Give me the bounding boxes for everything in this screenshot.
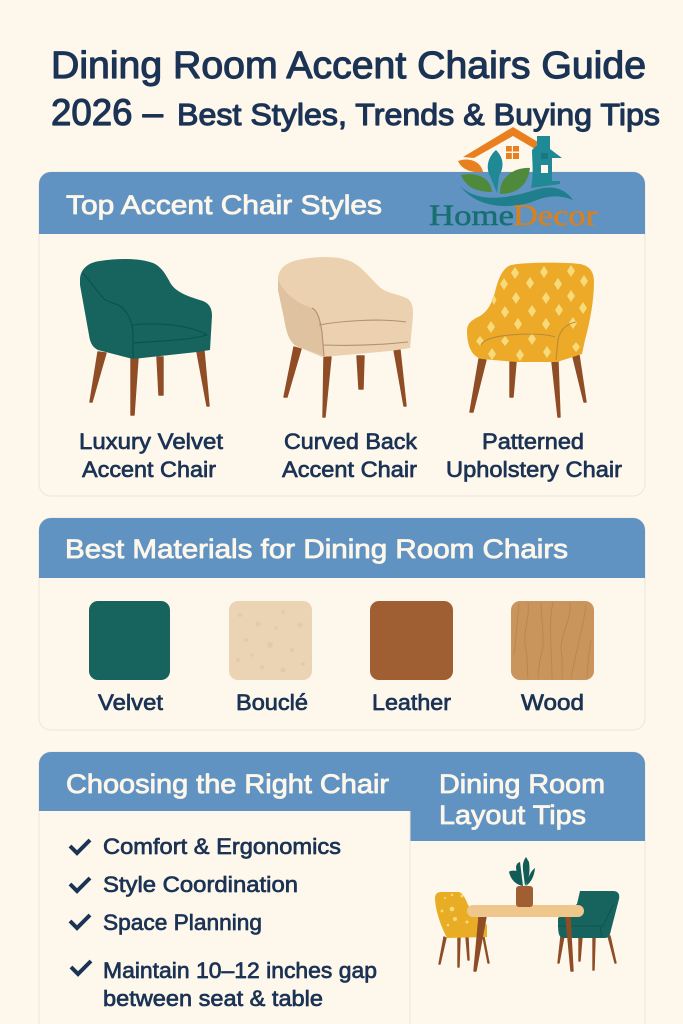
icon: patterned upholstery chair — [467, 263, 594, 417]
green chair — [558, 891, 619, 970]
label: luxury velvet accent chair: Luxury Velvet — [79, 429, 223, 454]
logo wordmark: Home — [429, 199, 514, 232]
logo house — [531, 136, 562, 188]
item: space: Space Planning — [103, 910, 262, 935]
panel header: best materials — [39, 518, 645, 578]
icon: check — [70, 878, 90, 891]
label: boucle: Bouclé — [236, 690, 308, 715]
potted plant — [509, 857, 535, 907]
item: maintain gap: between seat & table — [103, 986, 323, 1011]
icon: check — [70, 915, 90, 928]
swatch: velvet — [89, 601, 170, 680]
icon: curved back chair — [278, 257, 413, 417]
title: Dining Room Accent Chairs Guide — [51, 45, 646, 87]
label: luxury velvet accent chair — [79, 429, 223, 482]
title — [51, 45, 660, 133]
panel header: top accent chair styles — [39, 172, 645, 234]
icon: home decor logo: Decor — [513, 199, 597, 232]
icon: check — [71, 961, 91, 974]
yellow chair — [435, 892, 489, 967]
label: leather: Leather — [372, 690, 451, 715]
logo swoosh — [460, 186, 573, 206]
icon: check — [70, 840, 90, 853]
heading: best materials: Best Materials for Dining Room Chairs — [65, 534, 568, 564]
label: wood: Wood — [521, 690, 584, 715]
illustration: dining table with chairs — [435, 857, 619, 971]
table — [467, 905, 584, 971]
label: patterned upholstery chair — [446, 429, 622, 482]
item: maintain gap: Maintain 10–12 inches gap — [103, 958, 377, 983]
item: style: Style Coordination — [103, 872, 298, 897]
swatch: boucle — [229, 601, 312, 680]
panel: top accent chair styles — [39, 172, 645, 496]
title: 2026 – — [51, 92, 163, 133]
title: Best Styles, Trends & Buying Tips — [177, 97, 660, 132]
label: patterned upholstery chair: Upholstery Chair — [446, 457, 622, 482]
heading: dining room layout tips — [439, 769, 605, 830]
heading: choosing the right chair: Choosing the Right Chair — [66, 769, 389, 799]
label: curved back accent chair — [282, 429, 418, 482]
checklist — [70, 834, 377, 1011]
panel header: choosing and layout — [39, 752, 645, 841]
item: maintain gap — [103, 958, 377, 1011]
icon: home decor logo — [429, 127, 597, 232]
label: luxury velvet accent chair: Accent Chair — [82, 457, 216, 482]
logo window — [506, 146, 519, 159]
swatch: wood — [511, 601, 594, 680]
heading: top accent chair styles: Top Accent Chair Styles — [66, 190, 382, 220]
panel: best materials — [39, 518, 645, 730]
heading: dining room layout tips: Layout Tips — [439, 800, 586, 830]
label: curved back accent chair: Curved Back — [284, 429, 418, 454]
panel: choosing the right chair and layout tips — [39, 752, 645, 1024]
logo roof — [463, 127, 538, 158]
swatch: leather — [370, 601, 453, 680]
item: comfort: Comfort & Ergonomics — [103, 834, 341, 859]
label: curved back accent chair: Accent Chair — [282, 457, 417, 482]
label: patterned upholstery chair: Patterned — [482, 429, 584, 454]
icon: green velvet chair — [80, 259, 212, 415]
logo leaves — [458, 159, 483, 172]
heading: dining room layout tips: Dining Room — [439, 769, 605, 799]
label: velvet: Velvet — [98, 690, 163, 715]
